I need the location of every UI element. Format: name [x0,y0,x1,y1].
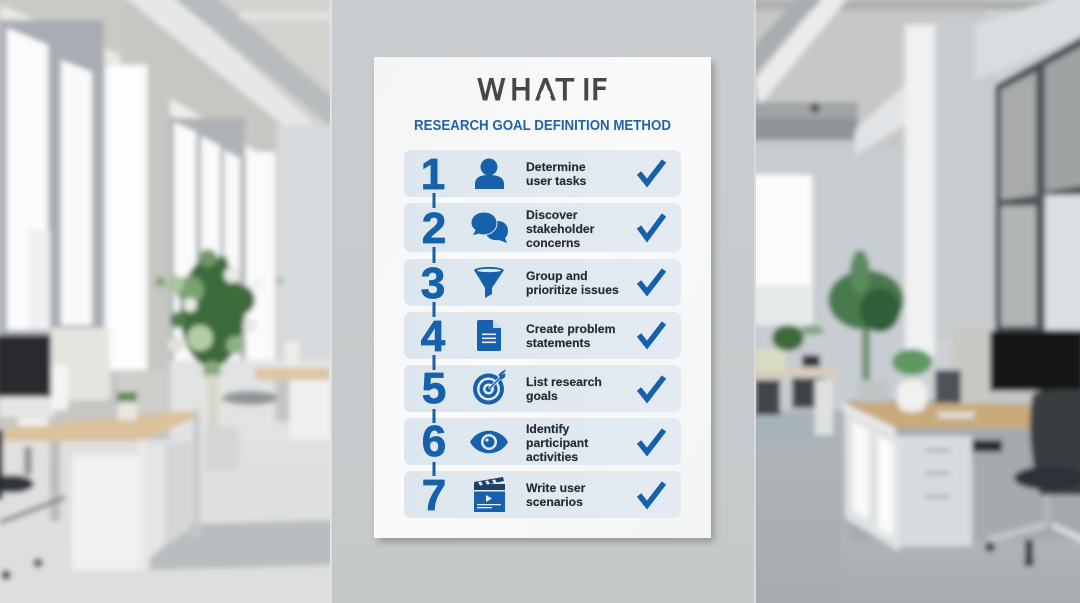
icon: eye [470,431,508,453]
title: logo: H [510,73,532,107]
step 5: 5 [422,364,446,413]
step 1: Determine [526,160,586,174]
heading: method title: RESEARCH GOAL DEFINITION METHOD [414,118,671,134]
icon: document [477,320,501,351]
step 3: Group and [526,269,588,283]
title: logo [477,73,608,107]
step 5 [422,364,664,413]
step rows background [404,150,681,518]
step 1 [421,150,664,199]
step 6: Identify [526,422,570,436]
title: logo: A [536,73,556,107]
title: logo: F [591,73,608,107]
title: logo: T [555,73,574,107]
step 3: 3 [421,259,445,308]
step 2: concerns [526,236,580,250]
icon: funnel [474,267,504,298]
title: logo: I [582,73,591,107]
step 4: 4 [421,312,446,361]
background: left office scene [0,0,335,603]
step 6: 6 [422,417,446,466]
step 7: Write user [526,481,586,495]
connector line between numbers [432,193,436,476]
step 1: 1 [421,150,445,199]
step 7: scenarios [526,495,583,509]
step 3: prioritize issues [526,283,619,297]
step 5: List research [526,375,602,389]
icon: clapperboard [474,477,505,512]
icon: chat bubbles [471,212,508,243]
step 6: participant [526,436,588,450]
step 3 [421,259,664,308]
step 2: Discover [526,208,578,222]
panel: central wall [330,0,756,603]
background: right office scene [750,0,1080,603]
step 6: activities [526,450,578,464]
icon: user [475,158,504,189]
panel: poster [374,57,714,542]
step 4 [421,312,664,361]
step 5: goals [526,389,558,403]
step 6 [422,417,664,466]
step 4: Create problem [526,322,616,336]
step 4: statements [526,336,591,350]
step 7 [422,471,664,520]
step 2: 2 [422,204,446,253]
step 2: stakeholder [526,222,595,236]
step 2 [422,204,664,253]
step 7: 7 [422,471,446,520]
step 1: user tasks [526,174,587,188]
icon: target [473,369,506,404]
title: logo: W [477,73,506,107]
